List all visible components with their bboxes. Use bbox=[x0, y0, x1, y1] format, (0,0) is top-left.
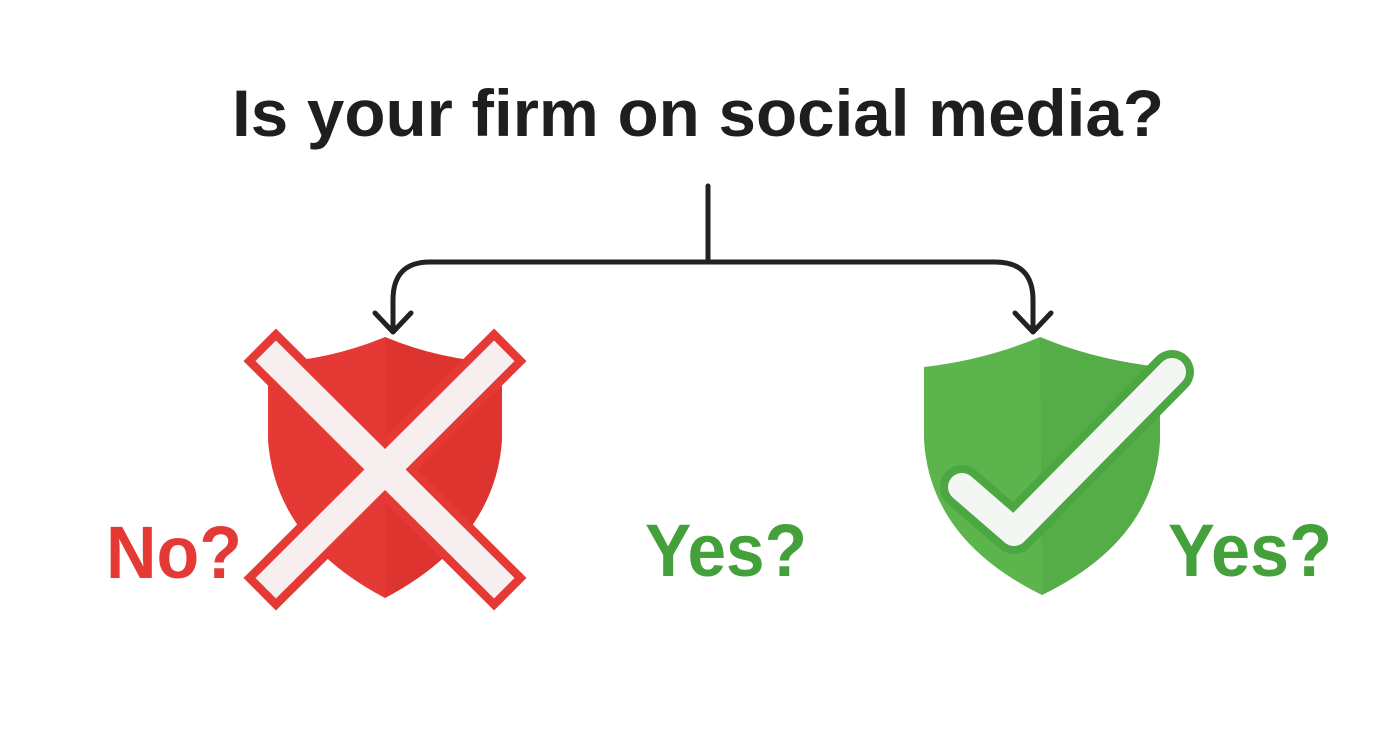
label: Yes? middle: Yes? bbox=[645, 509, 807, 592]
icon: red shield with X bbox=[268, 337, 502, 598]
label: No?: No? bbox=[106, 511, 242, 594]
label: Yes? right: Yes? bbox=[1168, 509, 1332, 592]
title: Is your firm on social media? bbox=[232, 76, 1164, 150]
icon: green shield with check bbox=[924, 337, 1172, 595]
arrow: branching connector bbox=[375, 186, 1051, 332]
